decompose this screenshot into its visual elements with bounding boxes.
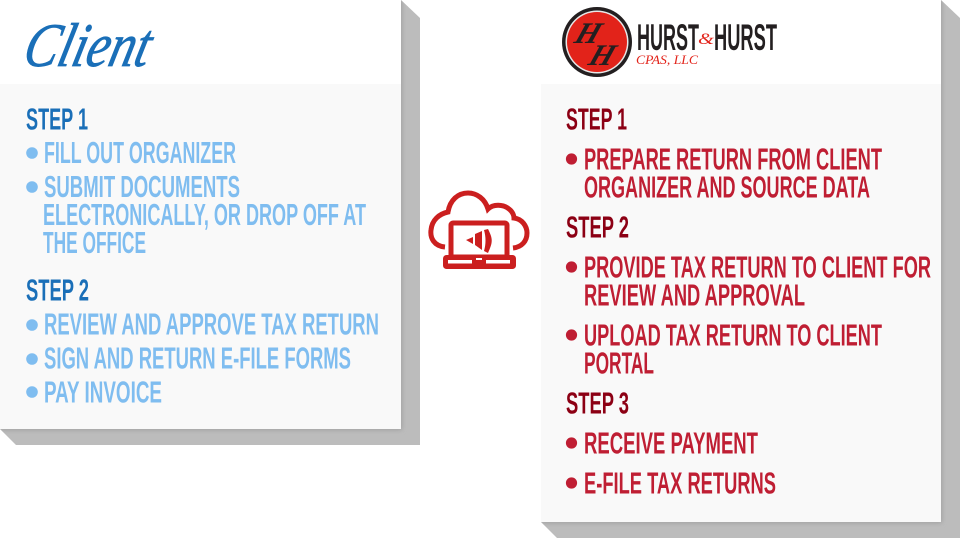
client heading: Client <box>18 11 161 80</box>
item: receive payment <box>566 426 758 460</box>
laptop screen <box>451 223 507 257</box>
item: sign and return: SIGN AND RETURN E-FILE FORMS <box>44 340 351 376</box>
item: pay invoice <box>26 374 162 410</box>
firm header background <box>541 0 941 84</box>
speaker waves <box>466 229 492 253</box>
item: pay invoice: PAY INVOICE <box>44 374 162 410</box>
item: e-file tax returns: E-FILE TAX RETURNS <box>584 466 776 500</box>
item: fill out organizer <box>26 135 236 170</box>
panel: hurst and hurst <box>541 0 960 538</box>
client step 2 <box>26 272 379 410</box>
item: review and approve <box>26 306 379 342</box>
item: fill out organizer: FILL OUT ORGANIZER <box>44 135 236 170</box>
item: prepare return <box>566 142 882 204</box>
firm panel shadow <box>541 0 960 538</box>
step 1 label: STEP 1 <box>566 102 627 136</box>
logo wordmark: CPAS, LLC <box>636 52 698 67</box>
item: e-file tax returns <box>566 466 776 500</box>
item: submit documents: SUBMIT DOCUMENTS <box>44 169 240 204</box>
step 2 label: STEP 2 <box>26 272 89 308</box>
item: upload tax return <box>566 318 882 380</box>
panel: hurst and hurst: HURST <box>714 17 777 58</box>
logo seal: H <box>584 38 622 72</box>
logo wordmark: & <box>698 31 715 48</box>
logo wordmark: HURST <box>637 17 699 58</box>
client header background <box>0 0 401 84</box>
step 2 label: STEP 2 <box>566 210 629 244</box>
item: submit documents: THE OFFICE <box>43 225 146 260</box>
client panel shadow <box>0 0 420 445</box>
client body background <box>0 84 401 429</box>
logo seal: H <box>570 16 608 50</box>
client step 1 <box>26 102 366 260</box>
logo seal <box>562 7 632 77</box>
firm step 3 <box>566 386 776 500</box>
cloud outline <box>431 193 527 248</box>
item: submit documents <box>26 169 366 260</box>
item: receive payment: RECEIVE PAYMENT <box>584 426 758 460</box>
laptop slots <box>448 258 510 264</box>
item: provide tax return: REVIEW AND APPROVAL <box>584 278 805 312</box>
step 3 label: STEP 3 <box>566 386 629 420</box>
item: sign and return <box>26 340 351 376</box>
item: provide tax return <box>566 250 931 312</box>
icon: cloud laptop <box>431 193 527 269</box>
firm step 1 <box>566 102 882 204</box>
laptop base <box>443 255 516 269</box>
item: upload tax return: PORTAL <box>584 346 654 380</box>
panel: client <box>0 0 420 445</box>
firm body background <box>541 84 941 522</box>
item: review and approve: REVIEW AND APPROVE TAX RETURN <box>44 306 379 342</box>
step 1 label: STEP 1 <box>26 102 88 136</box>
logo <box>562 7 777 77</box>
item: submit documents: ELECTRONICALLY, OR DROP OFF AT <box>43 197 366 232</box>
firm step 2 <box>566 210 931 380</box>
